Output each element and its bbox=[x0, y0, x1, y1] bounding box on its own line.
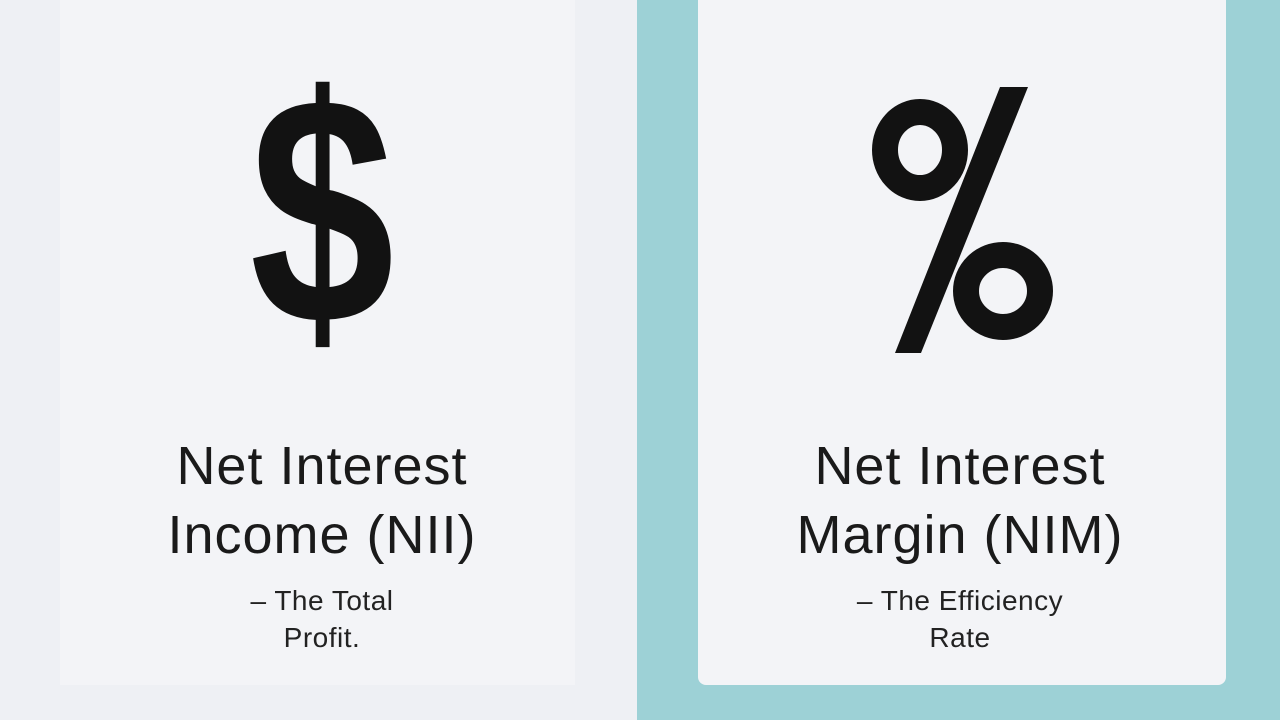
heading: NIM bbox=[796, 436, 1124, 565]
heading: NIM: Margin (NIM) bbox=[796, 505, 1124, 565]
heading: NII: Net Interest bbox=[176, 436, 468, 496]
icon: dollar sign: $ bbox=[250, 29, 394, 392]
heading: NII: Income (NII) bbox=[167, 505, 477, 565]
panel: left background card bbox=[60, 0, 575, 685]
panel: right card bbox=[698, 0, 1226, 685]
text: NIM description: – The Efficiency bbox=[857, 585, 1063, 616]
text: NIM description: Rate bbox=[929, 622, 991, 653]
text: NII description: – The Total bbox=[250, 585, 394, 616]
text: NII description bbox=[250, 585, 394, 653]
heading: NIM: Net Interest bbox=[814, 436, 1106, 496]
text: NII description: Profit. bbox=[284, 622, 360, 653]
heading: NII bbox=[167, 436, 477, 565]
panel: right teal background bbox=[637, 0, 1280, 720]
text: NIM description bbox=[856, 585, 1063, 653]
